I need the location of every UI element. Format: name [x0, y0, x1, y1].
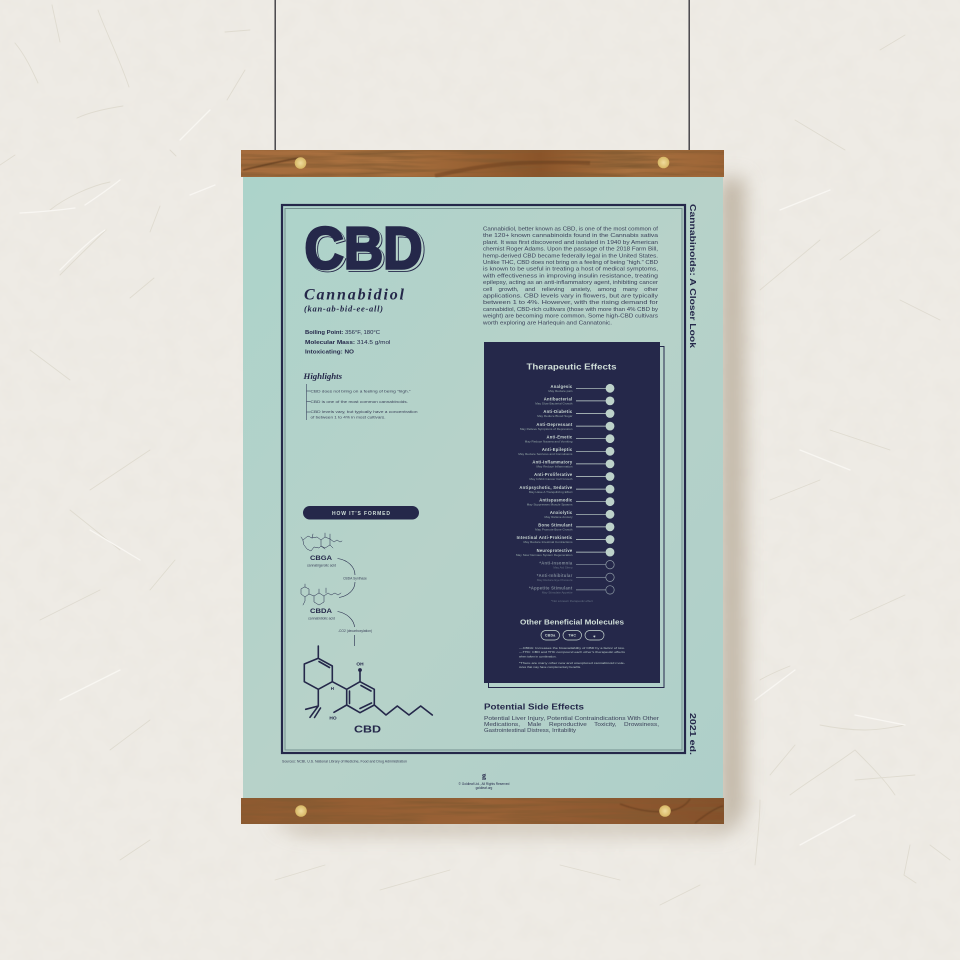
molecule: CBGA — [301, 533, 342, 551]
effects list rows: Anti-Depressant — [536, 422, 573, 427]
sources line: Sources: NCBI, U.S. National Library of Medicine, Food and Drug Administration — [282, 760, 407, 764]
pill labels — [545, 634, 596, 638]
effects list rows: May Aid Sleep — [553, 565, 573, 569]
label: decarboxylation: -CO2 (decarboxylation) — [338, 629, 372, 633]
effects list rows: Anti-Diabetic — [543, 409, 573, 414]
effects list rows: Analgesic — [550, 384, 573, 389]
effects list rows: *Anti-Insomnia — [539, 560, 573, 565]
effects list rows: May Reduce Seizures and Convulsions — [518, 452, 573, 456]
intro paragraph: chemist Roger Adams. Upon the passage of the 2018 Farm Bill, — [483, 247, 658, 253]
copyright: © Goldleaf Ltd., All Rights Reserved — [459, 782, 510, 786]
effects list rows: May Slow Nervous System Degeneration — [516, 553, 573, 557]
arrow: CBDA to CBD — [338, 612, 354, 646]
effects list rows: Anti-Inflammatory — [532, 460, 573, 465]
intro paragraph: between 1 to 4%. However, with the rising demand for — [483, 300, 658, 306]
properties list: Boiling Point: 356°F, 180°C — [305, 330, 380, 336]
molecule notes: —CBDA: Increases the bioavailability of CBD by a factor of two. — [519, 646, 625, 650]
side effects text: Gastrointestinal Distress, Irritability — [484, 728, 576, 734]
properties list — [305, 330, 390, 356]
intro paragraph: applications. CBD levels vary in flowers, but are typically — [483, 294, 659, 300]
highlights list: CBD does not bring on a feeling of being “high.” — [310, 390, 411, 394]
effects list rows: *Appetite Stimulant — [529, 586, 573, 591]
intro paragraph: is known to be useful in treating a host of medical symptoms, — [483, 267, 658, 273]
effects list rows: May Relieve Anxiety — [545, 515, 573, 519]
highlights list — [306, 384, 418, 420]
effects list rows: May Stimulate Appetite — [542, 591, 573, 595]
effects list rows: May Reduce Intestinal Contractions — [523, 540, 573, 544]
heading: potential side effects: Potential Side Effects — [484, 702, 585, 712]
icon: brass screw left — [295, 157, 306, 169]
effects list rows: Anti-Proliferative — [534, 472, 573, 477]
intro paragraph: Cannabidiol, better known as CBD, is one of the most common of — [483, 226, 659, 232]
molecule: CBD structure: HO — [329, 716, 337, 722]
pill heading: how it's formed — [303, 506, 419, 520]
highlights list: of between 1 to 4% in most cultivars. — [310, 416, 386, 420]
label: CBGA: CBGA — [310, 555, 332, 562]
molecule pills — [541, 630, 604, 640]
effects list rows: Antibacterial — [544, 397, 572, 402]
effects list rows: Neuroprotective — [537, 548, 573, 553]
effects list rows: Anxiolytic — [550, 510, 573, 515]
poster paper — [243, 177, 723, 798]
intro paragraph: cell growth, and relieving anxiety, among many other — [483, 287, 658, 293]
molecule: CBD structure: OH — [356, 662, 364, 668]
effects list rows: May Suppresses Muscle Spasms — [527, 502, 573, 506]
effects list rows: May Slow Bacterial Growth — [535, 402, 573, 406]
copyright: goldleaf.org — [476, 786, 493, 790]
label: cannabidiolic acid: cannabidiolic acid — [308, 616, 335, 620]
intro paragraph: with effectiveness in improving insulin resistance, treating — [483, 273, 658, 279]
effects list rows: Intestinal Anti-Prokinetic — [517, 535, 573, 540]
pill heading: how it's formed: HOW IT’S FORMED — [332, 511, 390, 517]
pill labels: THC — [568, 634, 576, 638]
molecule: CBD structure: H — [331, 686, 334, 691]
effects list rows: Bone Stimulant — [538, 523, 573, 528]
effects list rows: May Reduce Nausea and Vomiting — [525, 439, 573, 443]
title: CBD with outline shadow: CBD — [306, 217, 425, 283]
molecule notes: —THC: CBD and THC compound each other’s therapeutic effects — [519, 650, 626, 654]
molecule: CBD structure — [304, 646, 432, 736]
icon: brass screw bottom left — [295, 805, 307, 817]
intro paragraph: plant. It was first discovered and isolated in 1940 by American — [483, 240, 658, 246]
pill labels: CBDa — [545, 634, 556, 638]
intro paragraph: hemp-derived CBD became federally legal in the United States. — [483, 253, 658, 259]
poster cast shadow — [270, 178, 744, 832]
arrow: CBGA to CBDA — [338, 558, 355, 598]
effects list rows: Anti-Emetic — [546, 434, 573, 439]
subtitle: Cannabidiol: Cannabidiol — [304, 286, 405, 304]
molecule notes: *There are many other new and unexplored cannabinoid mole- — [519, 661, 625, 665]
effects list rows: May Inhibit Cancer Cell Growth — [529, 477, 573, 481]
effects list rows: May Reduce Eye Pressure — [537, 578, 573, 582]
top wooden rail — [241, 150, 724, 177]
molecule notes: cules that may have complementary benefits. — [519, 665, 581, 669]
highlights heading: Highlights — [302, 371, 343, 381]
bottom wooden rail — [241, 798, 724, 824]
pronunciation: (kan-ab-bid-ee-all) — [304, 304, 383, 314]
effects list rows: May Promote Bone Growth — [535, 528, 573, 532]
icon: brass screw bottom right — [659, 805, 671, 817]
label: cannabigerolic acid: cannabigerolic acid — [307, 564, 336, 568]
intro paragraph: worth exploring are Harlequin and Cannatonic. — [483, 320, 612, 326]
panel heading: Therapeutic Effects — [526, 362, 617, 372]
effects list rows: *Anti-Inhibitular — [537, 573, 573, 578]
title: CBD with outline shadow: CBD — [306, 218, 426, 284]
poster double frame — [282, 205, 685, 753]
icon: brass screw top right — [658, 157, 669, 168]
effects list rows: May Relieve Symptoms of Depression — [520, 427, 573, 431]
intro paragraph: cannabidiol, CBD-rich cultivars (those with more than 4% CBD by — [483, 307, 658, 313]
intro paragraph: epilepsy, acting as an anti-inflammatory agent, inhibiting cancer — [483, 280, 658, 286]
side title: Cannabinoids A Closer Look: Cannabinoids: A Closer Look — [688, 204, 698, 348]
copyright — [459, 782, 510, 790]
intro paragraph — [483, 226, 659, 326]
sub-heading: other beneficial molecules: Other Beneficial Molecules — [520, 618, 624, 626]
side effects text: Potential Liver Injury, Potential Contraindications With Other — [484, 716, 659, 722]
hanging string left — [274, 0, 276, 150]
effects list rows: Antipsychotic, Sedative — [519, 485, 573, 490]
footnote: *Not a known therapeutic effect — [551, 599, 593, 603]
effects list rows: Anti-Epileptic — [542, 447, 573, 452]
effects list rows: May Reduce Inflammation — [536, 465, 573, 469]
side effects text — [484, 716, 660, 734]
label: CBDA: CBDA — [310, 608, 332, 615]
molecule notes — [519, 646, 626, 669]
title: CBD with outline shadow: CBD — [304, 216, 422, 282]
label: CBD: CBD — [354, 724, 382, 736]
side effects text: Medications, Male Reproductive Toxicity, Drowsiness, — [484, 722, 660, 728]
pill labels: ∗ — [593, 634, 596, 638]
properties list: Molecular Mass: 314.5 g/mol — [305, 340, 390, 346]
molecule: CBDA — [301, 584, 341, 605]
intro paragraph: weight) are becoming more common. Some high-CBD cultivars — [483, 314, 658, 320]
publisher logo: g — [482, 771, 486, 780]
molecule notes: when taken in combination. — [519, 654, 557, 658]
label: CBDA synthase: CBDA Synthase — [343, 576, 367, 580]
side title: edition: 2021 ed. — [688, 713, 698, 755]
panel: therapeutic effects — [484, 342, 664, 688]
intro paragraph: Unlike THC, CBD does not bring on a feeling of being “high.” CBD — [483, 260, 658, 266]
highlights list: CBD is one of the most common cannabinoids. — [310, 400, 408, 404]
hanging string right — [688, 0, 690, 150]
effects list rows: May Have A Tranquilizing Effect — [529, 490, 573, 494]
effects list rows: Antispasmodic — [539, 497, 573, 502]
intro paragraph: the 120+ known cannabinoids found in the Cannabis sativa — [483, 233, 658, 239]
effects list rows: May Reduce pain — [548, 389, 573, 393]
highlights list: CBD levels vary, but typically have a concentration — [310, 410, 418, 414]
effects list rows: May Reduce Blood Sugar — [537, 414, 572, 418]
effects list rows — [516, 384, 614, 595]
properties list: Intoxicating: NO — [305, 350, 355, 356]
